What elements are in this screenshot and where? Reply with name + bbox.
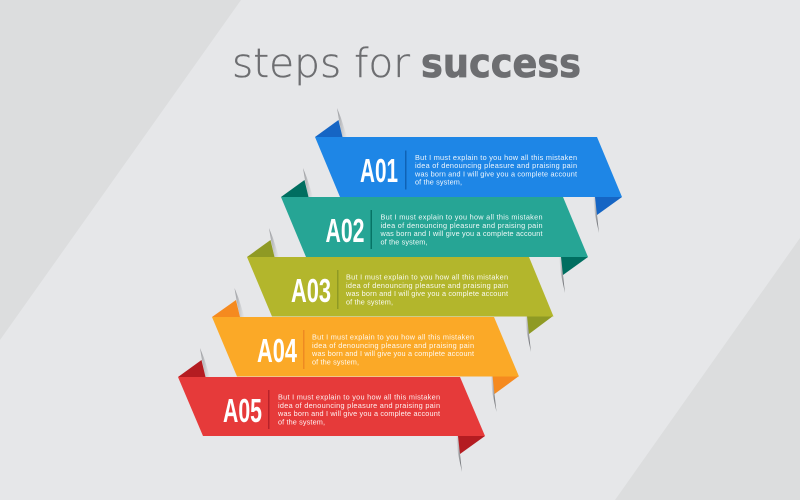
ribbon A01: A01: [360, 152, 398, 189]
ribbon A05: of the system,: [278, 417, 325, 426]
ribbon A01: was born and I will give you a complete account: [414, 169, 577, 178]
ribbon A02: [281, 168, 588, 293]
ribbon A03: was born and I will give you a complete account: [345, 289, 508, 298]
title: success: [421, 41, 581, 87]
ribbon A01: idea of denouncing pleasure and praising pain: [415, 161, 577, 170]
ribbon A02: of the system,: [380, 237, 428, 246]
ribbon A05: was born and I will give you a complete account: [277, 409, 440, 418]
ribbon A03: A03: [291, 272, 331, 309]
ribbon A02: was born and I will give you a complete account: [380, 229, 542, 238]
ribbon A05: A05: [223, 392, 262, 429]
ribbon A05: idea of denouncing pleasure and praising pain: [278, 401, 440, 410]
ribbon A02: But I must explain to you how all this mistaken: [380, 212, 542, 222]
ribbon A02: idea of denouncing pleasure and praising pain: [380, 221, 542, 230]
ribbon A05: But I must explain to you how all this mistaken: [278, 392, 440, 402]
title: [232, 41, 581, 87]
ribbon A04: But I must explain to you how all this mistaken: [312, 332, 474, 342]
ribbon A04: [212, 288, 519, 412]
ribbon A04: was born and I will give you a complete account: [311, 349, 474, 358]
background panel: bottom right diagonal: [615, 238, 800, 500]
ribbon A03: idea of denouncing pleasure and praising pain: [346, 281, 508, 290]
title: steps for: [232, 41, 411, 87]
ribbon A05: [178, 348, 485, 472]
ribbon A01: [315, 108, 622, 233]
ribbon A03: But I must explain to you how all this mistaken: [346, 272, 508, 282]
ribbon A03: of the system,: [346, 297, 393, 306]
ribbon A04: of the system,: [312, 357, 359, 366]
ribbon A03: [247, 228, 554, 352]
ribbon A01: of the system,: [415, 178, 462, 186]
ribbon A02: A02: [326, 212, 364, 249]
ribbon A01: But I must explain to you how all this mistaken: [415, 153, 577, 162]
ribbon A04: A04: [257, 332, 297, 369]
background panel: top left diagonal: [0, 0, 241, 340]
ribbon A04: idea of denouncing pleasure and praising pain: [312, 341, 474, 350]
